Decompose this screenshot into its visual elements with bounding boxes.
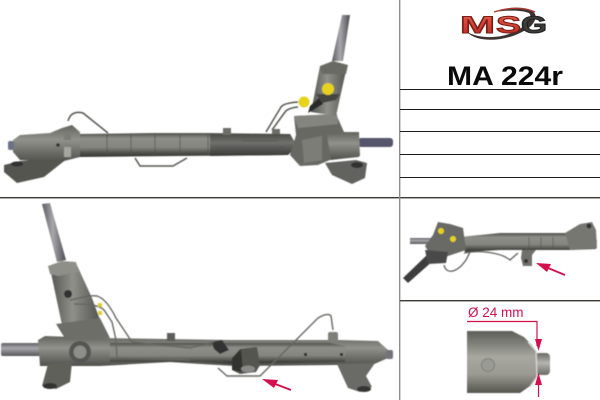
left housing bbox=[13, 125, 80, 162]
plug bbox=[482, 358, 494, 372]
logo: MSG: S bbox=[496, 12, 521, 39]
left mount bbox=[42, 362, 72, 389]
logo: MSG bbox=[460, 8, 547, 40]
tube joints bbox=[107, 133, 285, 156]
left bolts bbox=[64, 134, 71, 140]
steering rack: bottom main view bbox=[1, 203, 393, 392]
part number title: MA 224r bbox=[447, 61, 564, 91]
left mount bbox=[4, 158, 68, 183]
detail view: rod end bbox=[467, 331, 550, 393]
pipes bbox=[68, 102, 298, 166]
main tube bbox=[38, 336, 388, 366]
housing rim bbox=[528, 342, 537, 387]
connector on tube bbox=[212, 340, 229, 354]
valve port bbox=[64, 290, 72, 298]
right mount bbox=[325, 160, 367, 184]
details bbox=[304, 353, 343, 356]
rod tip bbox=[535, 353, 550, 375]
bosses bbox=[167, 333, 175, 341]
right mount bbox=[337, 363, 375, 392]
pipes bbox=[444, 252, 518, 271]
yellow caps bbox=[322, 83, 334, 95]
logo: MSG: G bbox=[521, 12, 547, 39]
right housing bbox=[565, 222, 597, 250]
left stub bbox=[410, 238, 438, 244]
main tube bbox=[76, 133, 297, 157]
left end cap bbox=[8, 141, 14, 150]
pipes bbox=[70, 296, 333, 376]
cylinder boss bbox=[69, 341, 91, 363]
valve column bbox=[50, 263, 100, 325]
steering rack: top main view bbox=[4, 15, 393, 184]
steering shaft bbox=[42, 203, 66, 262]
dimension: 24 mm bbox=[467, 305, 542, 397]
steering column shaft bbox=[332, 15, 350, 61]
arrow: small view bbox=[536, 263, 565, 275]
logo letters: M bbox=[460, 12, 495, 39]
body tube bbox=[460, 233, 597, 252]
steering rack: small view bbox=[403, 222, 597, 283]
dimension: 24 mm: Ø 24 mm bbox=[468, 305, 524, 320]
left stub bbox=[1, 343, 41, 356]
yellow marks bbox=[98, 303, 102, 307]
housing bbox=[467, 331, 537, 393]
shaft bbox=[403, 254, 434, 283]
ribs bbox=[529, 237, 553, 249]
logo swoosh bbox=[467, 8, 536, 40]
small boss on tube bbox=[223, 128, 231, 135]
right end cap bbox=[386, 350, 393, 359]
connector block bbox=[308, 96, 323, 113]
valve housing bbox=[290, 114, 359, 166]
threaded right stub bbox=[358, 138, 393, 147]
lower bracket bbox=[521, 250, 536, 266]
valve housing bbox=[425, 222, 466, 258]
mid clamp bbox=[232, 347, 260, 374]
yellow caps bbox=[438, 228, 444, 234]
valve column bbox=[311, 66, 347, 116]
arrow: bottom main view bbox=[262, 379, 291, 390]
